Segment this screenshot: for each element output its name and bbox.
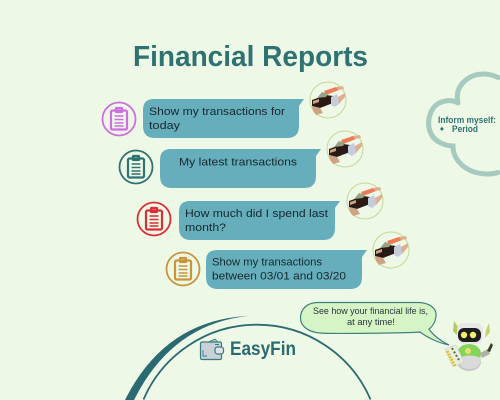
bubble shape bbox=[300, 302, 449, 345]
photo: hands with wallet 2 bbox=[327, 131, 363, 167]
brand name: EasyFin bbox=[230, 339, 296, 360]
cloud text: Inform myself: bbox=[438, 115, 496, 125]
icon: amber clipboard bbox=[166, 252, 200, 286]
speech bubble bbox=[300, 302, 449, 345]
logo: EasyFin bbox=[200, 339, 296, 360]
chat bubble 3: How much did I spend last bbox=[185, 208, 328, 220]
chat bubble 1: today bbox=[149, 120, 181, 132]
chat bubble 4 bbox=[206, 250, 367, 289]
row 1: transactions for today bbox=[102, 82, 346, 138]
row 4: transactions between dates bbox=[166, 232, 409, 289]
cloud outline bbox=[429, 74, 498, 174]
icon: robot mascot bbox=[445, 321, 493, 371]
photo: hands with wallet 3 bbox=[347, 183, 383, 219]
bubble text: See how your financial life is, bbox=[313, 306, 428, 316]
icon: teal clipboard bbox=[120, 150, 152, 184]
chat bubble 1: Show my transactions for bbox=[149, 106, 285, 118]
chat bubble 4: Show my transactions bbox=[212, 256, 323, 268]
cloud callout: • bbox=[440, 124, 444, 136]
cloud callout bbox=[429, 74, 498, 174]
chat bubble 2 bbox=[160, 149, 321, 188]
photo: hands with wallet 1 bbox=[310, 82, 346, 118]
thick tapered arc bbox=[125, 316, 248, 400]
chat bubble 1 bbox=[143, 99, 304, 138]
chat bubble 2: My latest transactions bbox=[179, 156, 298, 168]
chat bubble 3 bbox=[179, 201, 340, 240]
icon: purple clipboard bbox=[102, 102, 136, 136]
chat bubble 3: month? bbox=[185, 222, 226, 234]
speech bubble: at any time! bbox=[347, 317, 395, 327]
chat bubble 4: between 03/01 and 03/20 bbox=[212, 270, 346, 282]
decorative arcs bbox=[125, 316, 370, 400]
title: Financial Reports bbox=[133, 41, 368, 73]
icon: red clipboard bbox=[138, 202, 170, 236]
photo: hands with wallet 4 bbox=[373, 232, 409, 268]
cloud callout: Period bbox=[452, 124, 478, 134]
row 2: latest transactions bbox=[120, 131, 363, 188]
thin circle arc bbox=[144, 325, 370, 400]
row 3: spend last month bbox=[138, 183, 383, 240]
icon: wallet bbox=[200, 339, 224, 360]
